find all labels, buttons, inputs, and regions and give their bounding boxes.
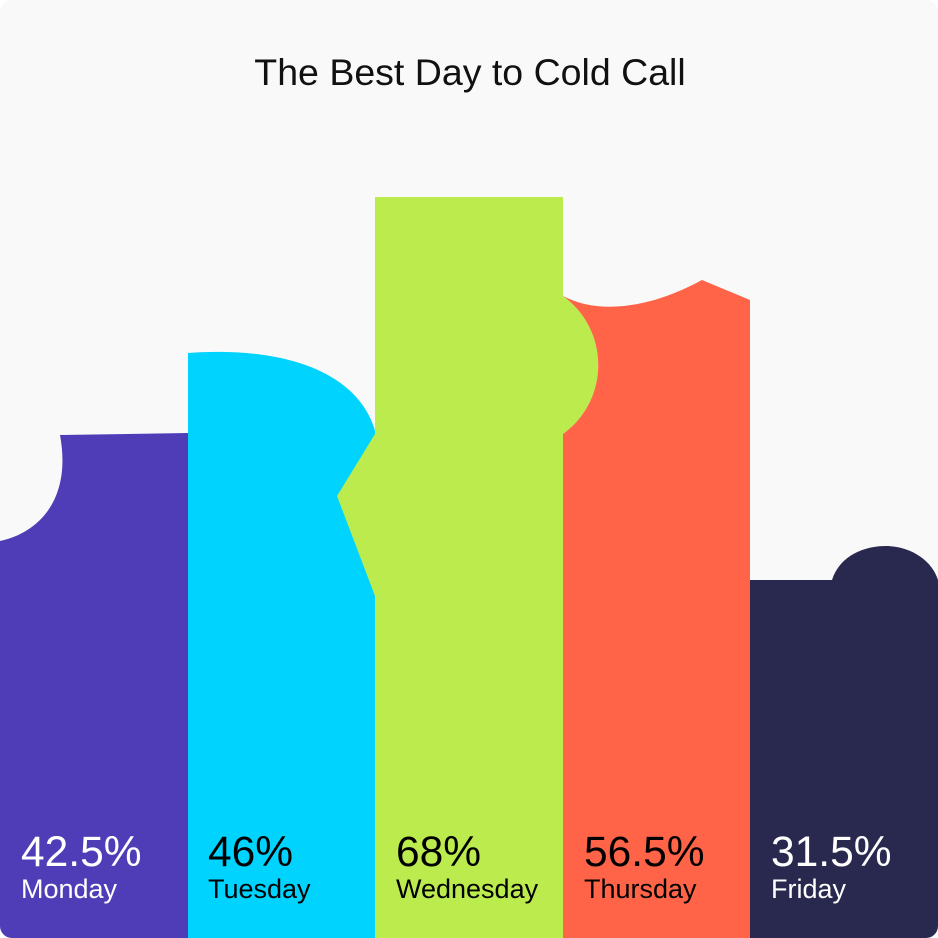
- label: Tuesday: [208, 836, 310, 904]
- label: Tuesday: 46%: [208, 829, 293, 876]
- bar: Monday: [0, 433, 188, 938]
- label: Friday: [772, 836, 890, 904]
- label: Tuesday: Tuesday: [208, 874, 311, 904]
- bar: Thursday: [563, 280, 750, 938]
- label: Monday: 42.5%: [21, 829, 142, 876]
- label: Wednesday: 68%: [396, 829, 481, 876]
- label: Thursday: [584, 836, 703, 904]
- label: Wednesday: Wednesday: [396, 874, 539, 904]
- bar: Tuesday: [188, 352, 376, 938]
- label: Friday: 31.5%: [771, 829, 892, 876]
- label: Monday: Monday: [21, 874, 118, 904]
- bar: Friday: [750, 546, 938, 938]
- bar: Wednesday: [337, 197, 598, 938]
- label: Thursday: 56.5%: [584, 829, 705, 876]
- label: Thursday: Thursday: [584, 874, 697, 904]
- label: Friday: Friday: [771, 874, 847, 904]
- label: Wednesday: [396, 836, 538, 904]
- title: The Best Day to Cold Call: [254, 51, 686, 93]
- label: Monday: [22, 836, 140, 904]
